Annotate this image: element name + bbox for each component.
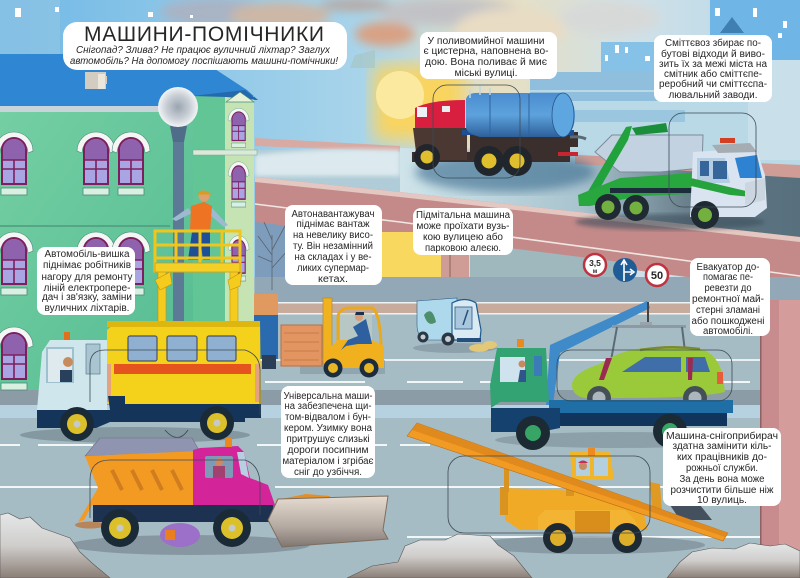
callout: tow truck: або пошкоджені [692, 315, 764, 327]
truck cab [37, 332, 261, 428]
callout: garbage truck: лювальний заводи. [668, 90, 758, 101]
callout: bucket truck: піднімає робітників [43, 259, 131, 271]
callout: water tanker: У поливомийної машини [428, 36, 544, 47]
heading: МАШИНИ-ПОМІЧНИКИ [84, 23, 324, 46]
callout: bucket truck: дач і зв'язку, заміни [42, 292, 132, 303]
blue truck behind forklift [254, 294, 278, 369]
callout: forklift: на невелику висо- [293, 230, 373, 241]
callout: bucket truck: вуличних ліхтарів. [44, 303, 130, 314]
street lamp [158, 87, 198, 323]
snow plow truck [70, 438, 388, 555]
callout: sweeper: може проїхати вузь- [416, 221, 510, 232]
callout: universal plow truck: на забезпечена щи- [284, 400, 372, 412]
callout: bucket truck [37, 247, 135, 315]
callout: universal plow truck: сніг до узбіччя. [294, 466, 362, 478]
garbage truck [575, 113, 767, 230]
lift basket [155, 231, 240, 272]
callout: tow truck: ремонтної май- [692, 294, 764, 305]
callout: water tanker: міські вулиці. [454, 68, 518, 79]
lift rods [155, 272, 242, 326]
callout: universal plow truck [281, 386, 375, 478]
callout: water tanker: дою. Вона поливає й миє [425, 57, 547, 68]
background: sky and clouds [0, 0, 800, 290]
water tanker truck [412, 85, 595, 192]
callout: tow truck: автомобілі. [703, 325, 753, 337]
callout: forklift: ту. Він незамінний [293, 241, 373, 252]
callout: universal plow truck: Універсальна маши- [284, 391, 372, 402]
snow pile left [0, 513, 110, 578]
callout: garbage truck [654, 35, 772, 102]
callout: garbage truck: зить їх за межі міста на [659, 59, 767, 70]
callout: universal plow truck: дороги посипним [288, 445, 369, 456]
callout: bucket truck: нагору для ремонту [42, 272, 132, 283]
callout: snow removal machine: За день вона може [680, 474, 765, 485]
callout: tow truck: ревезти до [704, 283, 752, 294]
callout: garbage truck: бутові відходи й виво- [661, 48, 765, 60]
pillar [760, 300, 800, 550]
callout: bucket truck: Автомобіль-вишка [44, 248, 130, 260]
callout: sweeper: Підмітальна машина [416, 210, 510, 221]
building with arched windows [0, 54, 258, 390]
intro text: Снігопад? Злива? Не працює вуличний ліхтар? Заглух [76, 45, 331, 56]
callout: water tanker: є цистерна, наповнена во- [424, 46, 548, 57]
callout: sweeper [413, 208, 513, 255]
intro text [70, 45, 338, 67]
callout: sweeper: парковою алеєю. [425, 243, 501, 254]
callout: universal plow truck: притрушує слизькі [286, 434, 370, 445]
callout: tow truck: помагає пе- [703, 272, 753, 283]
road signs: 50 [651, 270, 663, 282]
snow removal machine [407, 423, 728, 554]
bare tree [258, 222, 288, 290]
callout: universal plow truck: том-відвалом і бун- [285, 411, 371, 423]
background: distant blue buildings [15, 0, 800, 172]
road signs [584, 254, 668, 286]
snow pile centre [347, 534, 532, 578]
callout: garbage truck: смітник або сміттєпе- [664, 68, 762, 80]
tow truck with car [490, 301, 745, 450]
callout: tow truck: стерні зламані [696, 305, 760, 316]
callout: snow removal machine: розчистити більше ніж [670, 484, 774, 496]
callout: tow truck [690, 258, 770, 337]
callout: forklift: ликих супермар- [297, 263, 369, 274]
callout: tow truck: Евакуатор до- [696, 262, 760, 273]
callout: snow removal machine: 10 вулиць. [697, 495, 747, 506]
callout: snow removal machine: рожньої служби. [686, 462, 758, 474]
title panel [63, 22, 347, 70]
callout: snow removal machine: ких працівників до- [677, 452, 767, 463]
road signs: м [593, 269, 598, 275]
callout: forklift: Автонавантажувач [292, 209, 374, 220]
callout: universal plow truck: матеріалом і згрібає [282, 455, 374, 467]
worker in bucket [172, 190, 228, 260]
callout: snow removal machine: Машина-снігоприбирач [666, 430, 778, 442]
elevated road with pink retaining wall [255, 138, 800, 292]
forklift [281, 298, 385, 378]
callout: forklift [285, 205, 382, 285]
callout: universal plow truck: кером. Узимку вона [284, 423, 372, 434]
sun glow [374, 66, 464, 140]
callout: water tanker [420, 32, 557, 79]
callout: snow removal machine: здатна замінити кіль- [672, 441, 772, 452]
callout: forklift: на складах і у ве- [294, 252, 372, 263]
callout: sweeper: кою вулицею або [423, 231, 503, 243]
callout: garbage truck: Сміттєвоз збирає по- [665, 37, 761, 49]
callout: forklift: кетах. [318, 274, 348, 285]
street sweeper [413, 298, 497, 353]
snow pile right [667, 543, 800, 578]
callout: bucket truck: ліній електропере- [44, 283, 130, 294]
road signs: 3,5 [589, 258, 601, 268]
road surface with lanes [0, 277, 800, 578]
callout: snow removal machine [663, 428, 781, 506]
callout: forklift: піднімає вантаж [296, 219, 370, 230]
utility bucket truck [20, 272, 261, 443]
intro text: автомобіль? На допомогу поспішають машини-помічники! [70, 55, 338, 67]
callout: garbage truck: реробний чи сміттєспа- [659, 78, 767, 90]
box body [107, 321, 261, 404]
snow piles [0, 513, 800, 578]
